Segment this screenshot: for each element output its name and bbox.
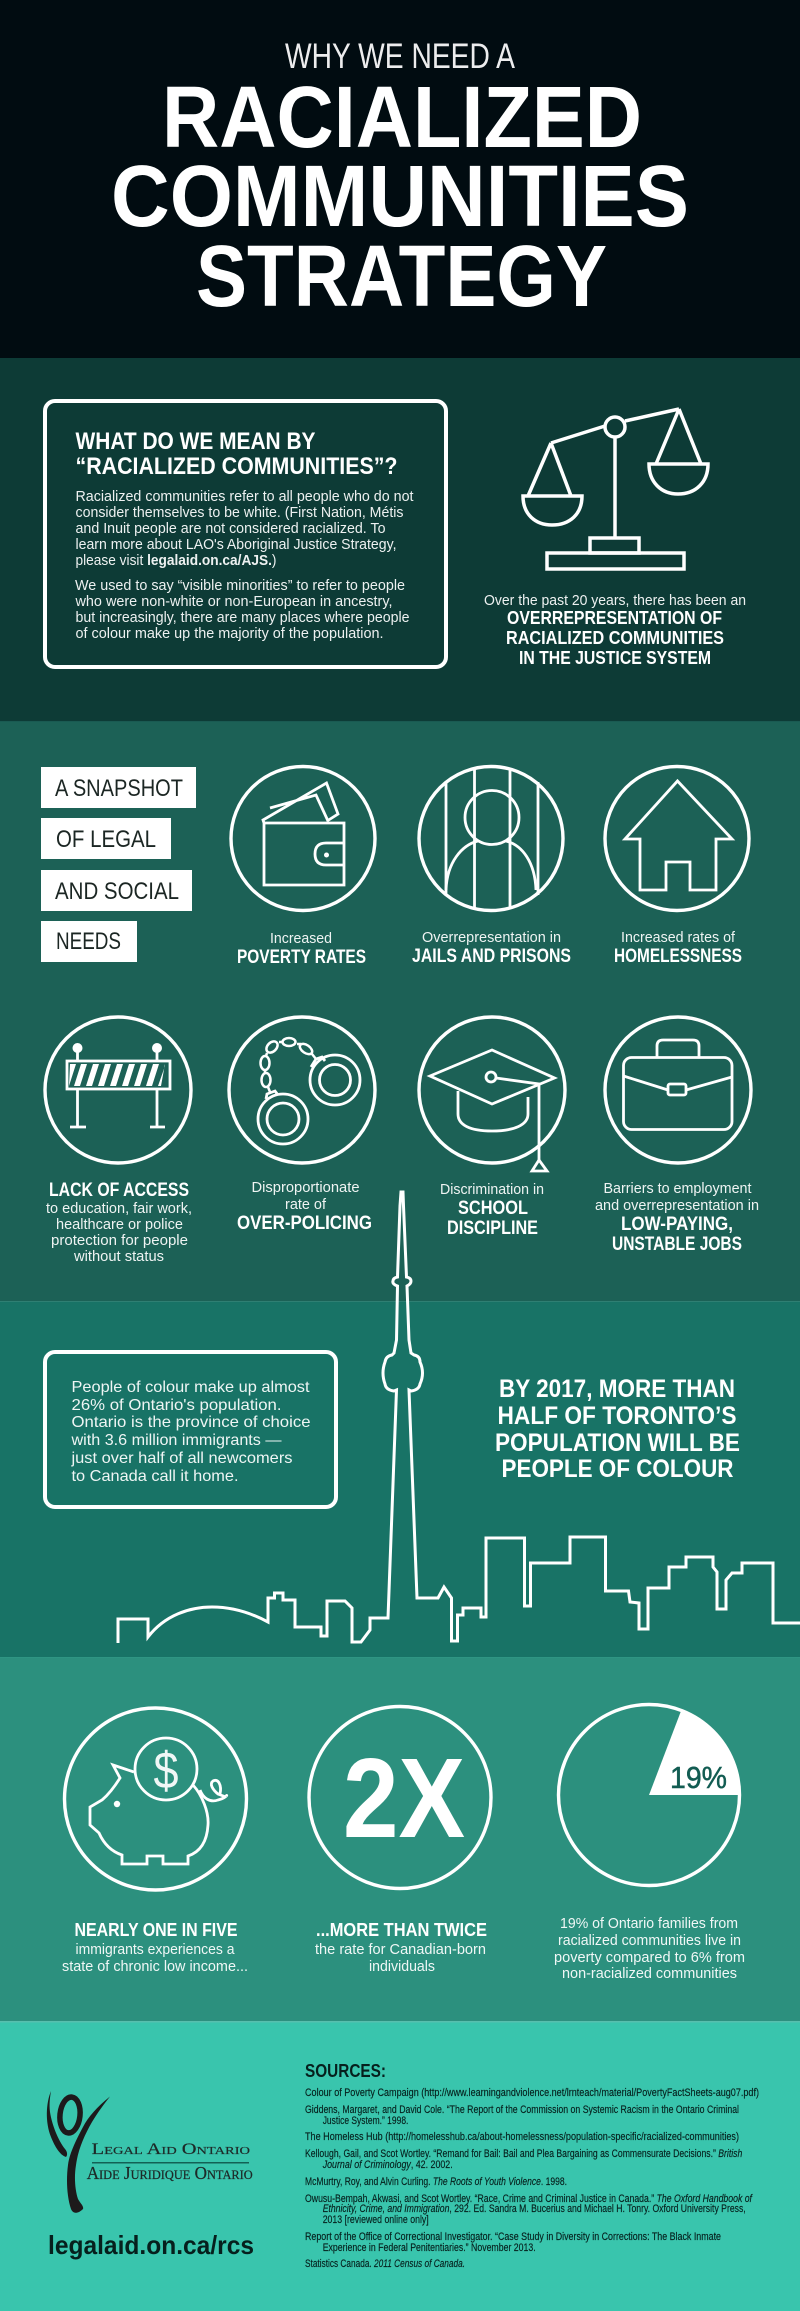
definition box outline	[45, 401, 446, 667]
kicker: WHY WE NEED A	[285, 37, 516, 76]
definition heading	[76, 428, 398, 480]
Toronto population statement: POPULATION WILL BE	[495, 1429, 740, 1457]
access caption: to education, fair work,	[46, 1200, 192, 1217]
title	[111, 37, 689, 325]
overrepresentation caption: IN THE JUSTICE SYSTEM	[519, 647, 711, 668]
icon: house	[605, 766, 749, 910]
icon: piggy bank with coin	[64, 1708, 246, 1890]
icon: road barrier	[45, 1017, 191, 1163]
poverty stat 3 caption	[554, 1915, 745, 1982]
school caption: DISCIPLINE	[447, 1218, 538, 1239]
poverty stat 1 caption: NEARLY ONE IN FIVE	[74, 1920, 238, 1940]
icon: piggy bank with coin: $	[154, 1742, 179, 1800]
jobs caption: and overrepresentation in	[595, 1197, 759, 1214]
logo figure	[47, 2091, 110, 2213]
definition paragraph 1: Racialized communities refer to all people who do not	[76, 488, 414, 505]
logo: Legal Aid Ontario	[47, 2091, 253, 2213]
school caption: SCHOOL	[458, 1198, 528, 1219]
poverty stat 2 caption	[315, 1920, 487, 1975]
jails caption: JAILS AND PRISONS	[412, 946, 571, 967]
icon: 2X in circle: 2X	[343, 1735, 465, 1861]
homelessness caption: HOMELESSNESS	[614, 946, 742, 967]
callout text: just over half of all newcomers	[70, 1450, 293, 1467]
overrepresentation caption: RACIALIZED COMMUNITIES	[506, 627, 724, 648]
poverty stat 3 caption: 19% of Ontario families from	[560, 1915, 738, 1932]
poverty stat 2 caption: the rate for Canadian-born	[315, 1941, 486, 1958]
jobs caption	[595, 1180, 759, 1255]
jobs caption: Barriers to employment	[604, 1180, 752, 1197]
homelessness caption	[614, 929, 742, 967]
poverty stat 1 caption: state of chronic low income...	[62, 1958, 248, 1975]
access caption: healthcare or police	[56, 1216, 183, 1233]
definition paragraph 2: but increasingly, there are many places where people	[76, 609, 410, 626]
icon: 2X in circle	[309, 1706, 491, 1888]
jobs caption: UNSTABLE JOBS	[612, 1234, 742, 1255]
icon: scales of justice	[523, 409, 708, 569]
source entries: Justice System.” 1998.	[323, 2115, 408, 2127]
homelessness caption: Increased rates of	[621, 929, 736, 946]
pie chart: 19%: 19%	[670, 1760, 727, 1795]
poverty stat 3 caption: poverty compared to 6% from	[554, 1949, 745, 1966]
definition paragraph 1: learn more about LAO's Aboriginal Justice Strategy,	[76, 536, 396, 553]
poverty stat 2 caption: ...MORE THAN TWICE	[316, 1920, 487, 1940]
definition paragraph 1: please visit legalaid.on.ca/AJS.)	[76, 552, 276, 569]
snapshot heading labels: NEEDS	[56, 928, 121, 955]
policing caption: OVER-POLICING	[237, 1213, 372, 1234]
overrepresentation caption: Over the past 20 years, there has been an	[484, 592, 746, 609]
title line 1: RACIALIZED	[162, 69, 642, 166]
access caption: protection for people	[51, 1232, 188, 1249]
logo wordmark French: Aide Juridique Ontario	[87, 2163, 253, 2183]
poverty caption: Increased	[270, 930, 332, 947]
icon: wallet	[231, 766, 375, 910]
school caption: Discrimination in	[440, 1181, 544, 1198]
overrepresentation caption	[484, 592, 746, 668]
definition paragraph 1	[76, 488, 414, 569]
source entries: Owusu-Bempah, Akwasi, and Scot Wortley. “Race, Crime and Criminal Justice in Canada.” The Oxford Handbook of	[305, 2193, 753, 2205]
policing caption: Disproportionate	[252, 1179, 360, 1196]
Toronto population statement: BY 2017, MORE THAN	[499, 1375, 735, 1403]
snapshot heading labels: OF LEGAL	[56, 826, 156, 853]
poverty stat 1 caption: immigrants experiences a	[76, 1941, 235, 1958]
title line 3: STRATEGY	[196, 228, 607, 325]
callout box outline	[45, 1352, 336, 1507]
panel: population callout	[45, 1352, 336, 1507]
definition paragraph 1: consider themselves to be white. (First Nation, Métis	[76, 504, 404, 521]
callout text: People of colour make up almost	[72, 1379, 310, 1396]
poverty stat 3 caption: racialized communities live in	[558, 1932, 741, 1949]
source entries: McMurtry, Roy, and Alvin Curling. The Roots of Youth Violence. 1998.	[305, 2176, 567, 2188]
definition paragraph 2: who were non-white or non-European in ancestry,	[75, 593, 392, 610]
snapshot heading labels	[41, 767, 196, 962]
panel: definition	[45, 401, 446, 667]
definition paragraph 2: of colour make up the majority of the population.	[76, 625, 384, 642]
poverty caption	[237, 930, 366, 968]
definition heading: “RACIALIZED COMMUNITIES”?	[76, 453, 398, 480]
sources list	[305, 2061, 759, 2270]
callout text: to Canada call it home.	[72, 1468, 238, 1485]
callout text: 26% of Ontario's population.	[72, 1397, 282, 1414]
icon: person behind bars	[419, 766, 563, 910]
jails caption: Overrepresentation in	[422, 929, 561, 946]
Toronto population statement	[495, 1375, 740, 1483]
Toronto skyline with CN Tower	[118, 1192, 800, 1643]
policing caption: rate of	[285, 1196, 327, 1213]
definition paragraph 1: and Inuit people are not considered racialized. To	[76, 520, 386, 537]
poverty caption: POVERTY RATES	[237, 947, 366, 968]
source entries: 2013 [reviewed online only]	[323, 2214, 429, 2226]
access caption	[46, 1180, 192, 1265]
icon: handcuffs	[229, 1017, 375, 1163]
jobs caption: LOW-PAYING,	[621, 1214, 733, 1235]
jails caption	[412, 929, 571, 967]
overrepresentation caption: OVERREPRESENTATION OF	[507, 607, 722, 628]
definition paragraph 2	[75, 577, 410, 642]
poverty stat 1 caption	[62, 1920, 248, 1975]
pie chart: 19%	[558, 1704, 741, 1886]
callout text: Ontario is the province of choice	[72, 1414, 311, 1431]
source entries: Experience in Federal Penitentiaries.” November 2013.	[323, 2242, 536, 2254]
source entries: Journal of Criminology, 42. 2002.	[322, 2159, 453, 2171]
callout text	[70, 1379, 311, 1485]
policing caption	[237, 1179, 372, 1234]
definition heading: WHAT DO WE MEAN BY	[76, 428, 316, 455]
access caption: LACK OF ACCESS	[49, 1180, 189, 1201]
icon: briefcase	[605, 1017, 751, 1163]
callout text: with 3.6 million immigrants —	[70, 1432, 281, 1449]
website link: legalaid.on.ca/rcs	[48, 2230, 254, 2260]
logo wordmark English: Legal Aid Ontario	[92, 2141, 250, 2158]
source entries: Statistics Canada. 2011 Census of Canada.	[305, 2258, 465, 2270]
poverty stat 2 caption: individuals	[369, 1958, 435, 1975]
sources heading: SOURCES:	[305, 2061, 386, 2081]
title line 2: COMMUNITIES	[111, 148, 689, 245]
snapshot heading labels: AND SOCIAL	[55, 878, 179, 905]
Toronto population statement: PEOPLE OF COLOUR	[502, 1455, 734, 1483]
school caption	[440, 1181, 544, 1239]
poverty stat 3 caption: non-racialized communities	[562, 1965, 737, 1982]
Toronto population statement: HALF OF TORONTO’S	[498, 1402, 736, 1430]
snapshot heading labels: A SNAPSHOT	[55, 775, 183, 802]
source entries	[305, 2087, 759, 2270]
definition paragraph 2: We used to say “visible minorities” to refer to people	[75, 577, 405, 594]
icon: graduation cap	[419, 1017, 565, 1171]
access caption: without status	[73, 1248, 164, 1265]
